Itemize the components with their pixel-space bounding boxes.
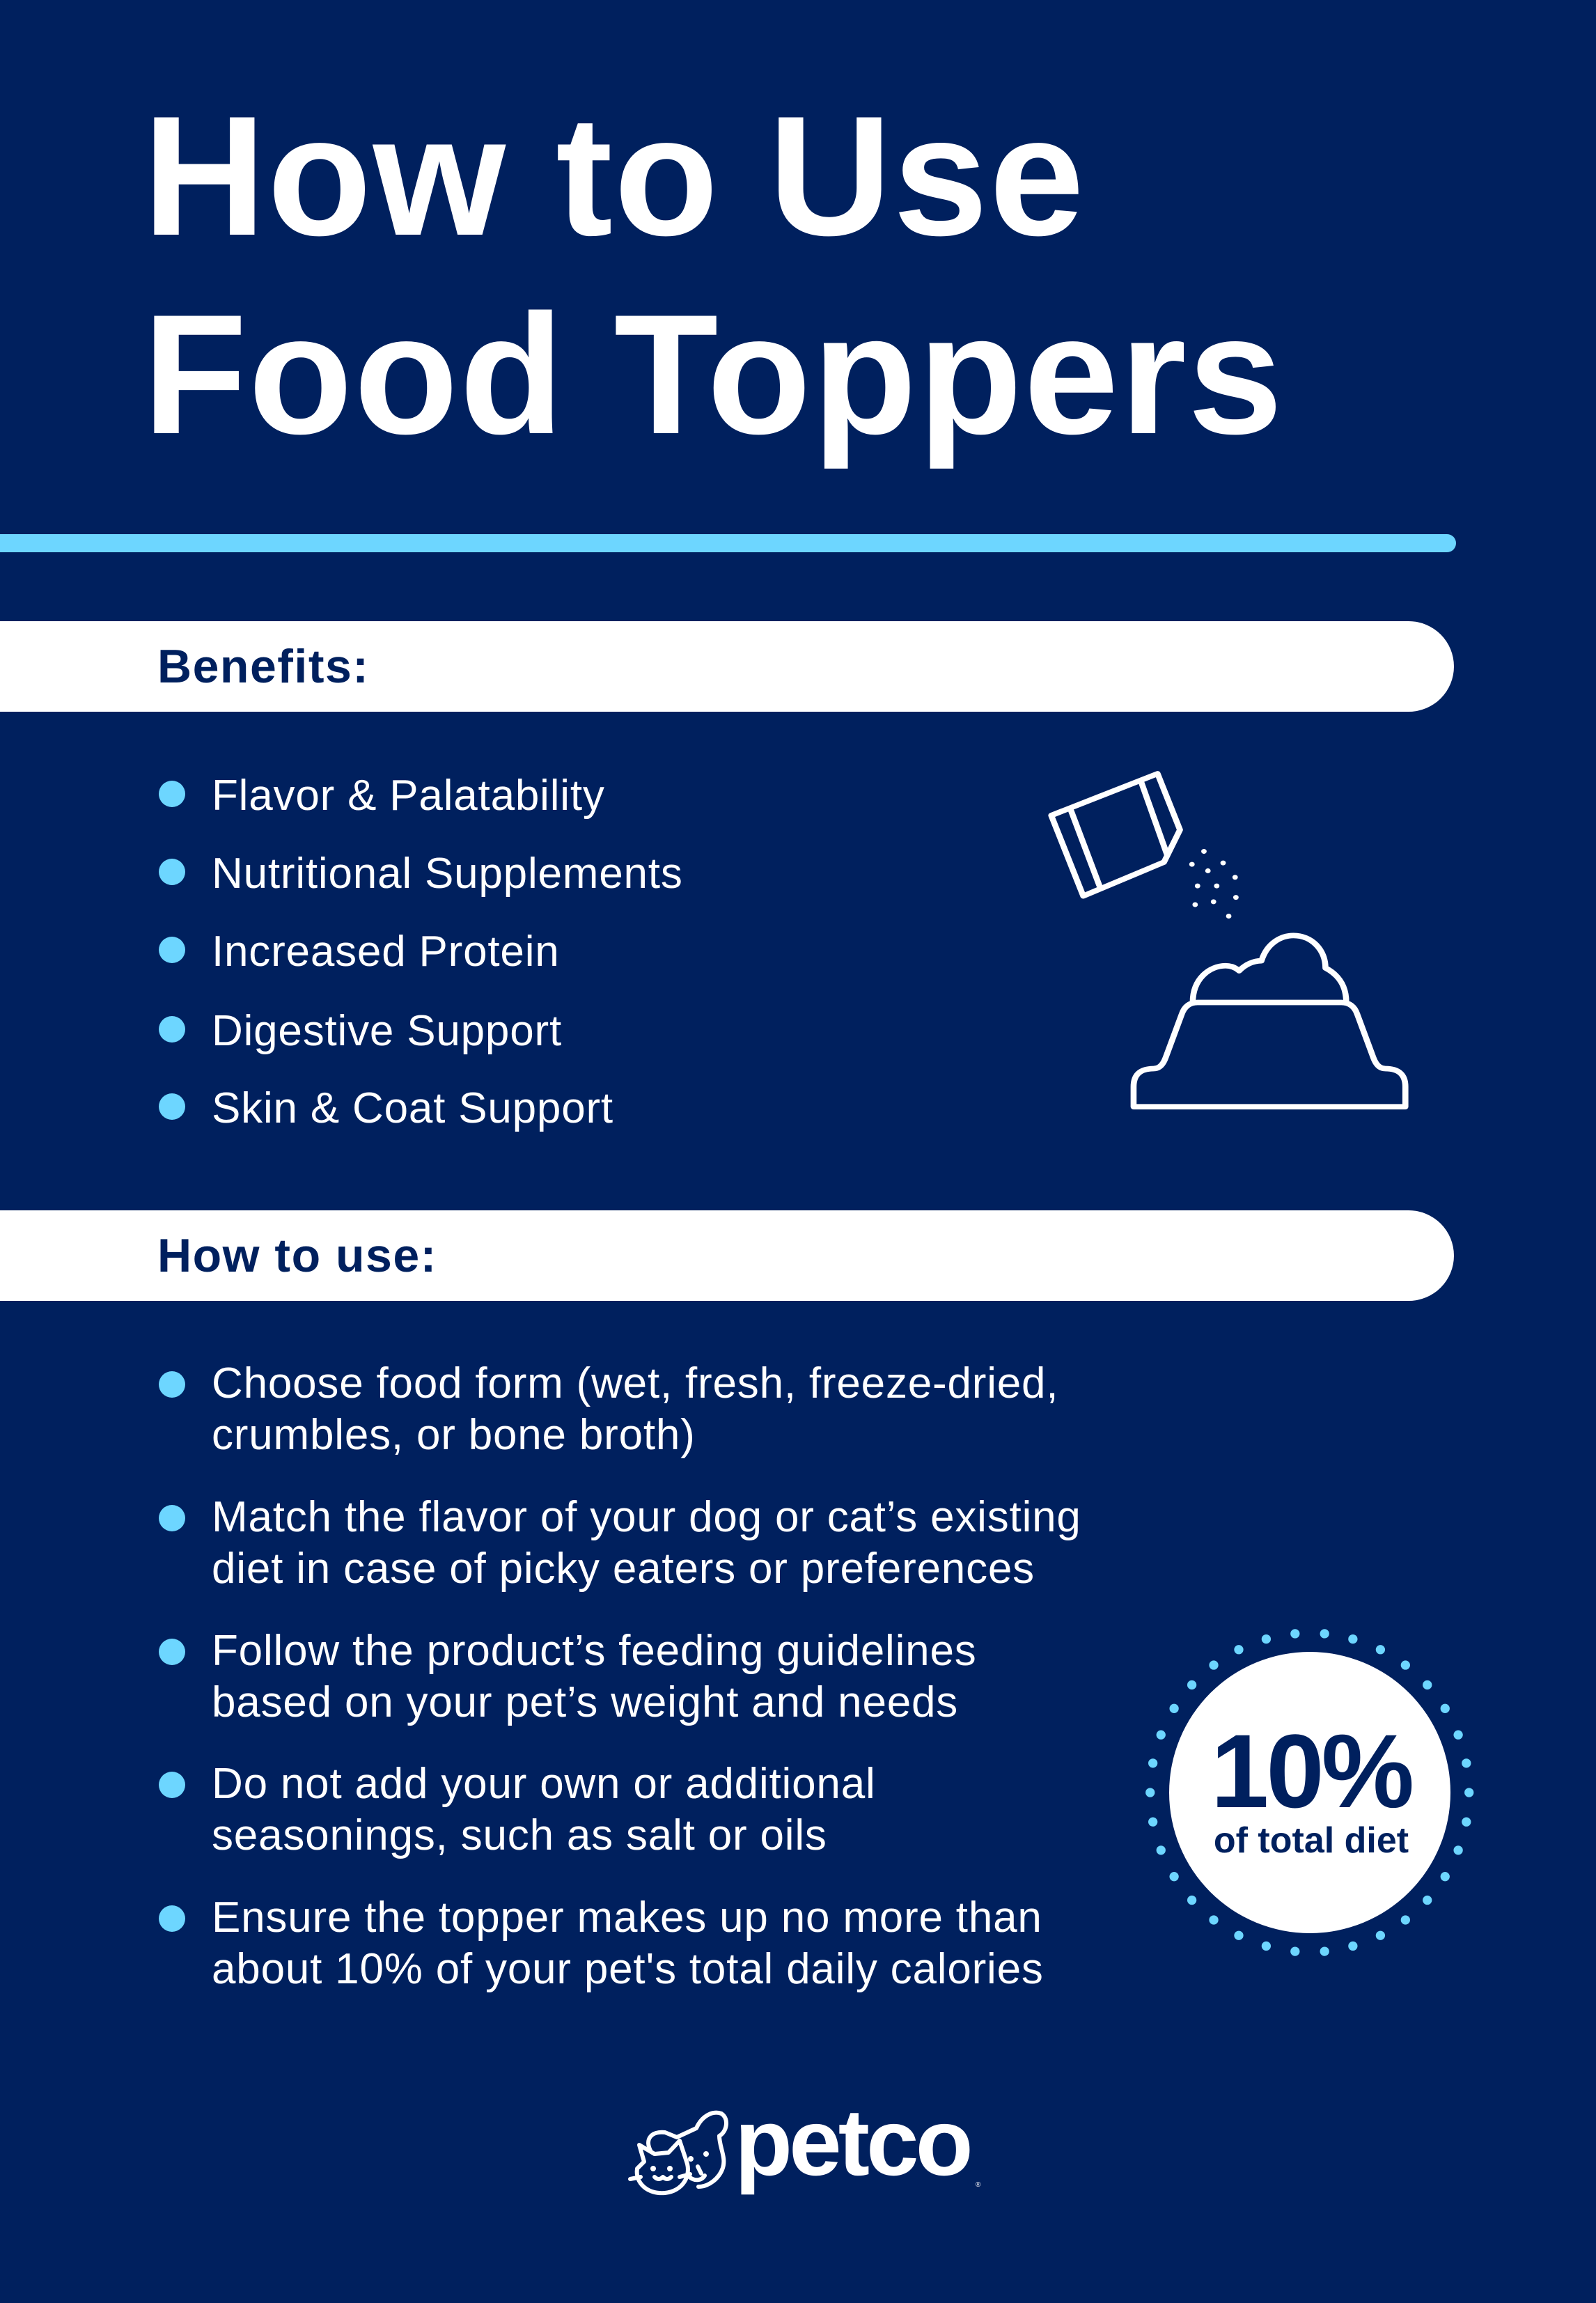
list: benefits	[159, 772, 683, 1132]
wordmark: petco	[735, 2089, 970, 2195]
icon: cat and dog	[628, 2110, 728, 2195]
heading: how to use: How to use:	[157, 1229, 437, 1282]
icon: bowl	[1134, 935, 1405, 1107]
badge: 10% of total diet: 10%	[1211, 1712, 1412, 1829]
list: how to use steps: Follow the product’s feeding guidelines	[212, 1627, 977, 1675]
list: how to use steps: about 10% of your pet's total daily calories	[212, 1945, 1044, 1993]
list: how to use steps: Match the flavor of your dog or cat’s existing	[212, 1493, 1081, 1541]
logo: petco	[628, 2089, 980, 2195]
title: How to Use	[143, 80, 1086, 271]
list: how to use steps: seasonings, such as salt or oils	[212, 1811, 827, 1859]
list: benefits: Digestive Support	[212, 1007, 562, 1055]
badge: 10% of total diet: of total diet	[1214, 1820, 1409, 1861]
logo: petco: ®	[976, 2181, 980, 2189]
title: Food Toppers	[143, 279, 1284, 469]
icon: bag	[1051, 774, 1180, 896]
list: benefits: Flavor & Palatability	[212, 772, 605, 820]
title	[143, 80, 1284, 469]
heading: how to use	[0, 1210, 1454, 1301]
icon: topper bag sprinkling onto bowl	[1048, 771, 1409, 1110]
badge: 10% of total diet	[1145, 1629, 1473, 1956]
list: how to use steps: crumbles, or bone broth)	[212, 1411, 696, 1459]
heading: benefits: Benefits:	[157, 640, 369, 693]
list: benefits: Skin & Coat Support	[212, 1084, 613, 1132]
list: how to use steps: Choose food form (wet, fresh, freeze-dried,	[212, 1359, 1058, 1407]
list: how to use steps: Do not add your own or additional	[212, 1760, 876, 1808]
list: how to use steps: diet in case of picky eaters or preferences	[212, 1545, 1035, 1593]
list: how to use steps: Ensure the topper makes up no more than	[212, 1894, 1042, 1942]
list: how to use steps	[159, 1359, 1081, 1993]
list: benefits: Nutritional Supplements	[212, 850, 683, 898]
accent bar	[0, 534, 1456, 552]
list: benefits: Increased Protein	[212, 928, 560, 976]
list: how to use steps: based on your pet’s weight and needs	[212, 1678, 958, 1726]
heading: benefits	[0, 621, 1454, 712]
